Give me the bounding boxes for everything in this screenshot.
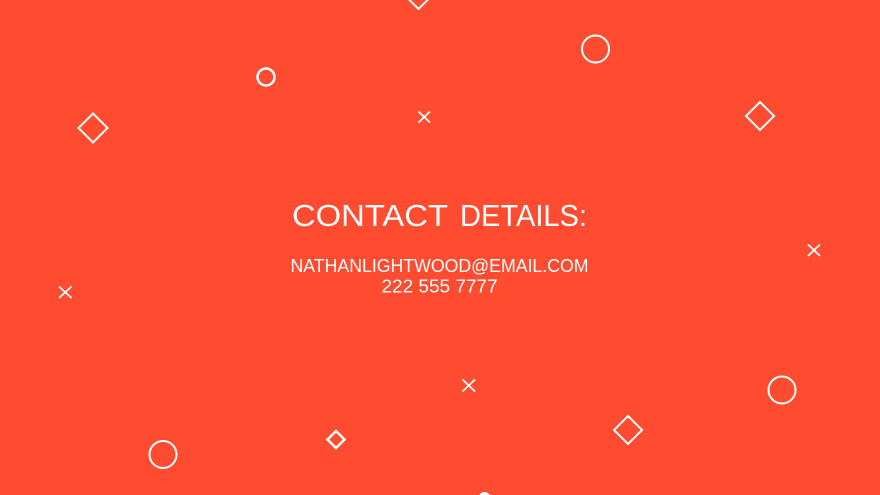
icon: cross top centre <box>418 112 430 122</box>
phone number: 222 555 7777 <box>382 276 498 296</box>
heading: CONTACT <box>292 198 448 233</box>
icon: cross left <box>59 286 72 298</box>
icon: diamond top edge <box>404 0 432 9</box>
icon: diamond lower right <box>614 416 642 444</box>
icon: cross bottom centre <box>462 380 475 392</box>
icon: circle bottom edge <box>479 492 490 495</box>
email address: NATHANLIGHTWOOD@EMAIL.COM <box>290 256 588 276</box>
heading <box>292 198 587 233</box>
icon: small circle top left <box>258 68 274 86</box>
icon: circle lower left <box>150 441 176 468</box>
heading: DETAILS: <box>460 198 587 233</box>
icon: circle lower right <box>768 376 796 404</box>
icon: circle top right <box>582 36 609 62</box>
contact text block <box>290 256 588 296</box>
icon: diamond left <box>78 114 108 142</box>
icon: cross right <box>808 244 820 256</box>
icon: diamond upper right <box>746 102 774 130</box>
icon: small diamond bottom <box>328 431 344 448</box>
